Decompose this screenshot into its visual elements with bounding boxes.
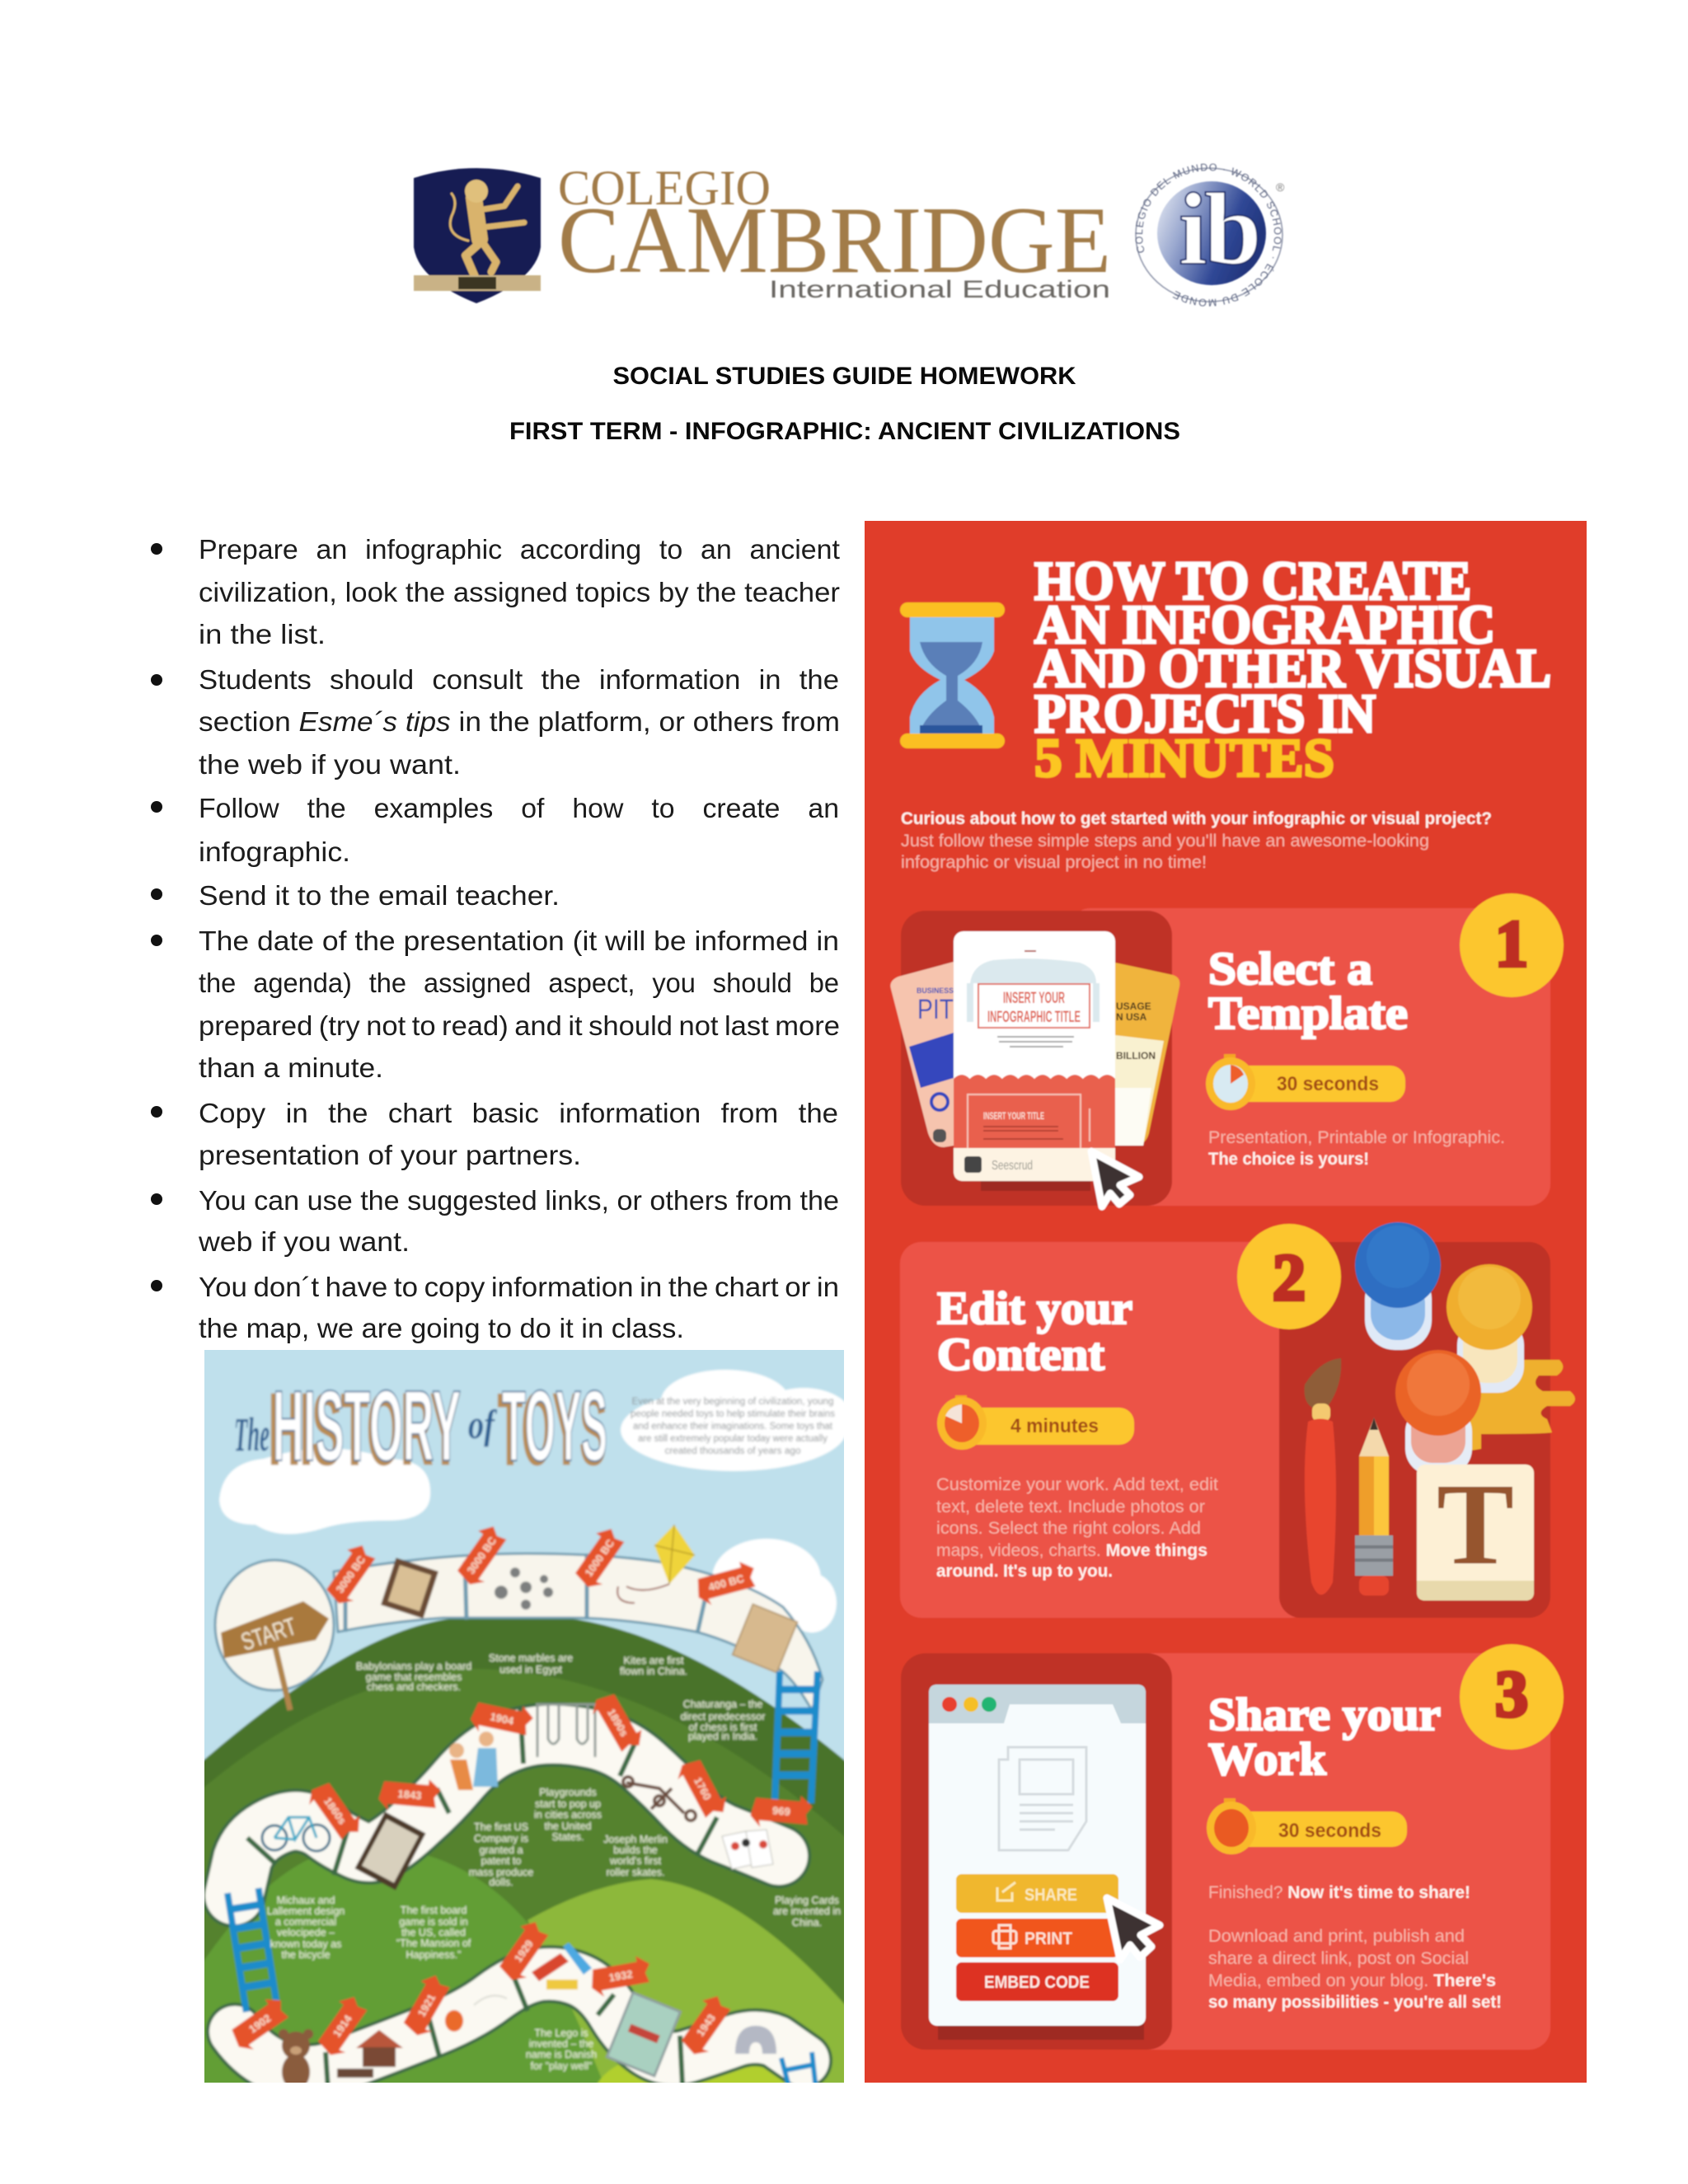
heading: select a template — [1208, 944, 1408, 1039]
icon: template cards: BUSINESS — [917, 987, 954, 995]
icon: log cabin — [337, 2030, 403, 2078]
board track: top arc with start — [215, 1554, 823, 1710]
intro text: Just follow these simple steps and you'll have an awesome-looking — [901, 832, 1429, 851]
instruction bullet list — [151, 534, 840, 1343]
icon: kite — [617, 1525, 695, 1603]
button: share — [956, 1874, 1118, 1913]
caption: roller skates: Joseph Merlin — [603, 1834, 668, 1845]
caption: playgrounds: the United — [545, 1821, 592, 1832]
icon: text block T — [1417, 1459, 1534, 1601]
intro text in cloud: created thousands of years ago — [664, 1446, 801, 1456]
caption: dolls: dolls. — [489, 1877, 513, 1888]
step 2 description: text, delete text. Include photos or — [936, 1497, 1205, 1516]
icon: yellow paint splash — [1448, 1360, 1575, 1451]
flag 969 — [749, 1792, 814, 1831]
step 1 description: The choice is yours! — [1208, 1150, 1369, 1169]
caption: kites: Kites are first — [624, 1655, 684, 1666]
flag 1843 — [377, 1775, 442, 1815]
icon: template cards: Seescrud — [992, 1159, 1033, 1173]
icon: IB world school seal: b — [1204, 173, 1262, 287]
icon: number badge 3 — [1460, 1644, 1564, 1750]
caption: playgrounds: Playgrounds — [539, 1787, 597, 1798]
icon: ball — [445, 1995, 507, 2032]
icon: number badge 3: 3 — [1495, 1658, 1528, 1731]
caption: marbles: Stone marbles are — [489, 1652, 573, 1664]
caption: board game: "The Mansion of — [396, 1938, 471, 1949]
bullet: do not copy information: the map, we are going to do it in class. — [199, 1313, 684, 1343]
step 1 description: Presentation, Printable or Infographic. — [1208, 1128, 1505, 1147]
icon: IB world school seal: i — [1179, 173, 1207, 287]
bullet: prepare an infographic — [151, 534, 840, 649]
flag 1943 — [674, 1990, 738, 2060]
icon: START sign — [221, 1601, 329, 1710]
step 2 description: icons. Select the right colors. Add — [936, 1519, 1201, 1538]
flag 3000 BC marbles — [450, 1521, 513, 1591]
icon: monopoly board — [607, 1993, 680, 2076]
caption: bicycle: known today as — [270, 1938, 341, 1950]
title: how to create: 5 MINUTES — [1034, 728, 1334, 789]
panel: The History of Toys example infographic: TOYS — [498, 1373, 607, 1485]
timer: 30 seconds — [1207, 1798, 1407, 1854]
intro text in cloud: and enhance their imaginations. Some toys that — [633, 1422, 833, 1432]
caption: bicycle: the bicycle — [281, 1949, 331, 1961]
timeline flags — [225, 1521, 814, 2061]
bullet: consult Esme's tips: the web if you want. — [199, 749, 461, 780]
flag 1860s — [303, 1776, 367, 1846]
icon: template cards — [890, 931, 1179, 1191]
caption: playing cards: are invented in — [773, 1905, 841, 1917]
flag 1914: 1914 — [331, 2013, 354, 2039]
title: The History of Toys: The — [234, 1408, 270, 1461]
icon: paint brush — [1305, 1358, 1341, 1595]
icon: school shield with lion — [414, 168, 541, 303]
caption: playing cards: China. — [792, 1917, 822, 1929]
caption: bicycle: Lallement design — [267, 1905, 345, 1917]
caption: kites: flown in China. — [620, 1666, 687, 1677]
icon: ladder right — [775, 1671, 818, 1803]
title: The History of Toys: HISTORY — [269, 1373, 460, 1485]
bullet: do not copy information: You don´t have to copy information in the chart or in — [199, 1272, 839, 1302]
caption: Babylonians: chess and checkers. — [367, 1681, 461, 1693]
icon: cursor arrow — [1091, 1151, 1139, 1207]
panel: step 2 edit your content — [900, 1222, 1575, 1618]
school logo header — [412, 161, 1285, 307]
icon: IB world school seal: ® — [1276, 180, 1285, 194]
icon: stone marbles — [495, 1568, 553, 1610]
timer: 30 seconds: 30 seconds — [1278, 1820, 1381, 1842]
caption: dolls: Company is — [474, 1833, 528, 1844]
icon: bicycle — [262, 1817, 330, 1851]
flag 1943: 1943 — [694, 2012, 718, 2038]
logo wordmark: Cambridge: CAMBRIDGE — [558, 188, 1111, 293]
caption: playgrounds: States. — [552, 1831, 584, 1843]
title: how to create: AND OTHER VISUAL — [1034, 638, 1551, 699]
timer: 30 seconds — [1206, 1054, 1405, 1110]
heading: edit your content: Content — [937, 1329, 1104, 1380]
icon: IB world school seal: COLEGIO DEL MUNDO · WORLD SCHOOL · ÉCOLE DU MONDE · — [1135, 163, 1282, 307]
icon: template cards: USAGE — [1116, 1001, 1151, 1012]
flag 1890s: 1890s — [605, 1707, 631, 1739]
title: The History of Toys: of — [468, 1401, 497, 1447]
flag 1000 BC — [568, 1523, 631, 1593]
bullet: prepare an infographic: civilization, look the assigned topics by the teacher — [199, 577, 840, 607]
button: print: PRINT — [1025, 1929, 1072, 1948]
icon: document — [999, 1747, 1086, 1850]
icon: number badge 1: 1 — [1495, 908, 1528, 981]
caption: playgrounds: in cities across — [534, 1809, 602, 1821]
caption: Lego: for "play well" — [531, 2060, 592, 2072]
step 2 description — [936, 1475, 1218, 1581]
hills — [204, 1617, 844, 2083]
step 3 description — [1208, 1883, 1502, 2012]
caption: chaturanga: played in India. — [688, 1731, 757, 1742]
caption: Babylonians: game that resembles — [366, 1671, 462, 1683]
icon: blue paint pot — [1355, 1222, 1441, 1350]
caption: chaturanga: of chess is first — [689, 1722, 757, 1733]
bullet: date of the presentation: the agenda) the assigned aspect, you should be — [199, 968, 839, 998]
bullet: suggested links: You can use the suggested links, or others from the — [199, 1185, 839, 1216]
timeline captions — [267, 1652, 841, 2072]
panel: The History of Toys example infographic: TOYS — [502, 1370, 607, 1482]
panel: How to create an infographic — [857, 515, 1595, 2089]
heading: edit your content: Edit your — [937, 1283, 1132, 1334]
caption: roller skates: roller skates. — [607, 1867, 664, 1878]
flag 1929 — [492, 1916, 556, 1986]
icon: playing cards — [722, 1830, 773, 1869]
flag 1890s — [587, 1688, 648, 1758]
bullet: date of the presentation — [151, 926, 840, 1083]
icon: number badge 2 — [1237, 1224, 1341, 1329]
icon: ladder bottom right — [781, 2052, 816, 2089]
flag 1843: 1843 — [397, 1788, 422, 1802]
icon: dolls — [449, 1732, 498, 1790]
flag 1000 BC: 1000 BC — [583, 1536, 617, 1579]
intro text in cloud: are still extremely popular today were actually — [638, 1434, 828, 1444]
intro text in cloud: Even at the very beginning of civilization, young — [631, 1397, 834, 1407]
caption: bicycle: velocipede – — [277, 1927, 335, 1938]
bullet: copy in the chart: presentation of your partners. — [199, 1140, 581, 1170]
caption: board game: Happiness." — [406, 1949, 461, 1961]
icon: hourglass — [900, 602, 1005, 748]
bullet: prepare an infographic: Prepare an infographic according to an ancient — [199, 534, 840, 565]
intro text in cloud: people needed toys to help stimulate their brains — [631, 1409, 835, 1419]
step 2 description: maps, videos, charts. Move things — [936, 1541, 1207, 1560]
board track: winding road — [234, 1706, 804, 2089]
bullet: do not copy information — [151, 1272, 839, 1343]
flag 1902 — [225, 1992, 295, 2055]
panel: The History of Toys example infographic — [204, 1350, 844, 2083]
icon: checkerboard — [381, 1558, 438, 1619]
bullet: copy in the chart — [151, 1098, 838, 1170]
intro text — [901, 809, 1492, 872]
icon: text block T: T — [1437, 1459, 1514, 1589]
bullet: send to the teacher: Send it to the email teacher. — [199, 880, 560, 911]
heading: share your work: Share your — [1208, 1690, 1441, 1741]
icon: slinky — [735, 2026, 776, 2054]
icon: pencil — [1355, 1418, 1393, 1596]
icon: browser window — [929, 1685, 1146, 2040]
heading: select a template: Select a — [1208, 944, 1372, 995]
flag 1932 — [588, 1954, 654, 1999]
bullet: date of the presentation: The date of the presentation (it will be informed in — [199, 926, 839, 956]
flag 1904 — [468, 1696, 535, 1742]
heading: edit your content — [937, 1283, 1132, 1380]
title: The History of Toys — [234, 1388, 607, 1467]
panel: step 3 share your work — [901, 1644, 1564, 2050]
button: embed code — [956, 1962, 1118, 2001]
icon: ladder left — [227, 1888, 277, 2012]
flag 3000 BC marbles: 3000 BC — [465, 1534, 499, 1577]
clouds — [219, 1370, 853, 1633]
heading: share your work — [1208, 1690, 1441, 1785]
caption: board game: The first board — [401, 1905, 467, 1916]
intro text: infographic or visual project in no time! — [901, 853, 1207, 872]
bullet: consult Esme's tips: section Esme´s tips in the platform, or others from — [199, 706, 840, 737]
caption: roller skates: world's first — [609, 1855, 662, 1867]
panel: step 1 select a template — [890, 893, 1564, 1207]
bullet: date of the presentation: prepared (try not to read) and it should not last more — [199, 1010, 840, 1041]
title: how to create: PROJECTS IN — [1034, 683, 1376, 744]
heading: document title — [509, 363, 1180, 445]
flag 1921: 1921 — [415, 1992, 438, 2019]
icon: template cards: INSERT YOUR TITLE — [983, 1110, 1044, 1122]
caption: dolls: patent to — [481, 1855, 521, 1867]
icon: START sign: START — [238, 1613, 300, 1657]
bullet: suggested links — [151, 1185, 839, 1257]
title: how to create — [1034, 551, 1551, 789]
flag 969: 969 — [771, 1804, 790, 1818]
intro text in cloud — [631, 1397, 835, 1456]
icon: chaturanga board — [733, 1605, 797, 1672]
bullet: follow the examples — [151, 793, 839, 867]
step 3 description: Finished? Now it's time to share! — [1208, 1883, 1470, 1902]
title: how to create: HOW TO CREATE — [1034, 551, 1471, 612]
icon: roller skates — [623, 1777, 696, 1821]
paint tools illustration — [1237, 1222, 1575, 1601]
caption: bicycle: Michaux and — [277, 1895, 335, 1906]
bullet: suggested links: web if you want. — [198, 1226, 410, 1257]
icon: yellow paint pot — [1447, 1264, 1532, 1393]
icon: IB world school seal — [1134, 163, 1285, 307]
heading: document title: FIRST TERM - INFOGRAPHIC: ANCIENT CIVILIZATIONS — [509, 418, 1180, 445]
icon: swing set — [536, 1704, 597, 1757]
flag 1860s: 1860s — [321, 1795, 349, 1826]
icon: number badge 2: 2 — [1273, 1242, 1306, 1315]
flag 1904: 1904 — [489, 1710, 515, 1727]
heading: share your work: Work — [1208, 1734, 1327, 1785]
heading: select a template: Template — [1208, 988, 1408, 1039]
icon: orange paint pot — [1395, 1350, 1481, 1475]
flag 1921 — [396, 1971, 457, 2041]
icon: building blocks — [532, 1943, 592, 1990]
heading: document title: SOCIAL STUDIES GUIDE HOMEWORK — [613, 363, 1076, 390]
flag 400 BC: 400 BC — [707, 1572, 746, 1593]
bullet: follow the examples: infographic. — [199, 837, 350, 867]
step 1 description — [1208, 1128, 1505, 1169]
bullet: prepare an infographic: in the list. — [199, 619, 326, 649]
caption: Lego: The Lego is — [534, 2027, 588, 2039]
step 2 description: around. It's up to you. — [936, 1562, 1113, 1581]
button: embed code: EMBED CODE — [984, 1973, 1090, 1992]
icon: first board game — [354, 1811, 426, 1890]
icon: template cards: BILLION — [1116, 1050, 1156, 1062]
caption: board game: the US, called — [401, 1927, 466, 1938]
caption: chaturanga: direct predecessor — [681, 1711, 765, 1722]
flag 1760 — [673, 1754, 732, 1824]
flag 1914 — [311, 1991, 374, 2061]
caption: roller skates: builds the — [613, 1844, 658, 1856]
flag 1760: 1760 — [692, 1775, 714, 1802]
caption: playgrounds: start to pop up — [535, 1798, 601, 1810]
icon: number badge 1 — [1460, 893, 1564, 997]
bullet: copy in the chart: Copy in the chart basic information from the — [199, 1098, 838, 1128]
button: share: SHARE — [1025, 1886, 1077, 1905]
caption: dolls: The first US — [474, 1821, 528, 1833]
icon: teddy bear — [279, 2029, 313, 2090]
timer: 4 minutes: 4 minutes — [1010, 1415, 1099, 1437]
caption: Lego: invented – the — [529, 2038, 593, 2050]
timer: 4 minutes — [937, 1395, 1134, 1450]
flag 1902: 1902 — [246, 2012, 273, 2036]
timer: 30 seconds: 30 seconds — [1277, 1073, 1379, 1095]
caption: Babylonians: Babylonians play a board — [356, 1661, 471, 1672]
flag 3000 BC: 3000 BC — [334, 1553, 368, 1596]
step 3 description: share a direct link, post on Social — [1208, 1949, 1469, 1968]
icon: template cards: N USA — [1116, 1011, 1147, 1023]
logo wordmark: Colegio: COLEGIO — [558, 161, 771, 215]
flag 1932: 1932 — [608, 1968, 634, 1984]
step 3 description: Media, embed on your blog. There's — [1208, 1971, 1496, 1990]
caption: board game: game is sold in — [399, 1916, 468, 1928]
icon: template cards: PIT — [917, 994, 954, 1025]
bullet: consult Esme's tips — [151, 664, 840, 780]
title: The History of Toys: HISTORY — [273, 1370, 461, 1482]
bullet: date of the presentation: than a minute. — [199, 1052, 383, 1083]
flag 3000 BC — [319, 1540, 382, 1610]
caption: dolls: granted a — [480, 1844, 523, 1856]
caption: marbles: used in Egypt — [499, 1664, 562, 1675]
caption: chaturanga: Chaturanga – the — [683, 1699, 762, 1710]
caption: playing cards: Playing Cards — [775, 1895, 839, 1906]
icon: template cards: INFOGRAPHIC TITLE — [987, 1009, 1081, 1026]
button: print — [956, 1919, 1118, 1957]
caption: Lego: name is Danish — [526, 2049, 597, 2060]
caption: bicycle: a commercial — [275, 1916, 336, 1928]
logo tagline: International Education — [769, 276, 1110, 303]
flag 1929: 1929 — [512, 1938, 536, 1964]
step 2 description: Customize your work. Add text, edit — [936, 1475, 1218, 1494]
step 3 description: Download and print, publish and — [1208, 1927, 1465, 1946]
caption: dolls: mass produce — [469, 1867, 533, 1878]
step 3 description: so many possibilities - you're all set! — [1208, 1993, 1502, 2012]
title: how to create: AN INFOGRAPHIC — [1034, 594, 1495, 655]
bullet: follow the examples: Follow the examples of how to create an — [199, 793, 839, 823]
bullet: consult Esme's tips: Students should consult the information in the — [199, 664, 839, 695]
intro text: Curious about how to get started with your infographic or visual project? — [901, 809, 1492, 828]
flag 400 BC — [692, 1558, 760, 1608]
icon: cursor arrow — [1107, 1898, 1160, 1960]
icon: template cards: INSERT YOUR — [1003, 990, 1065, 1007]
